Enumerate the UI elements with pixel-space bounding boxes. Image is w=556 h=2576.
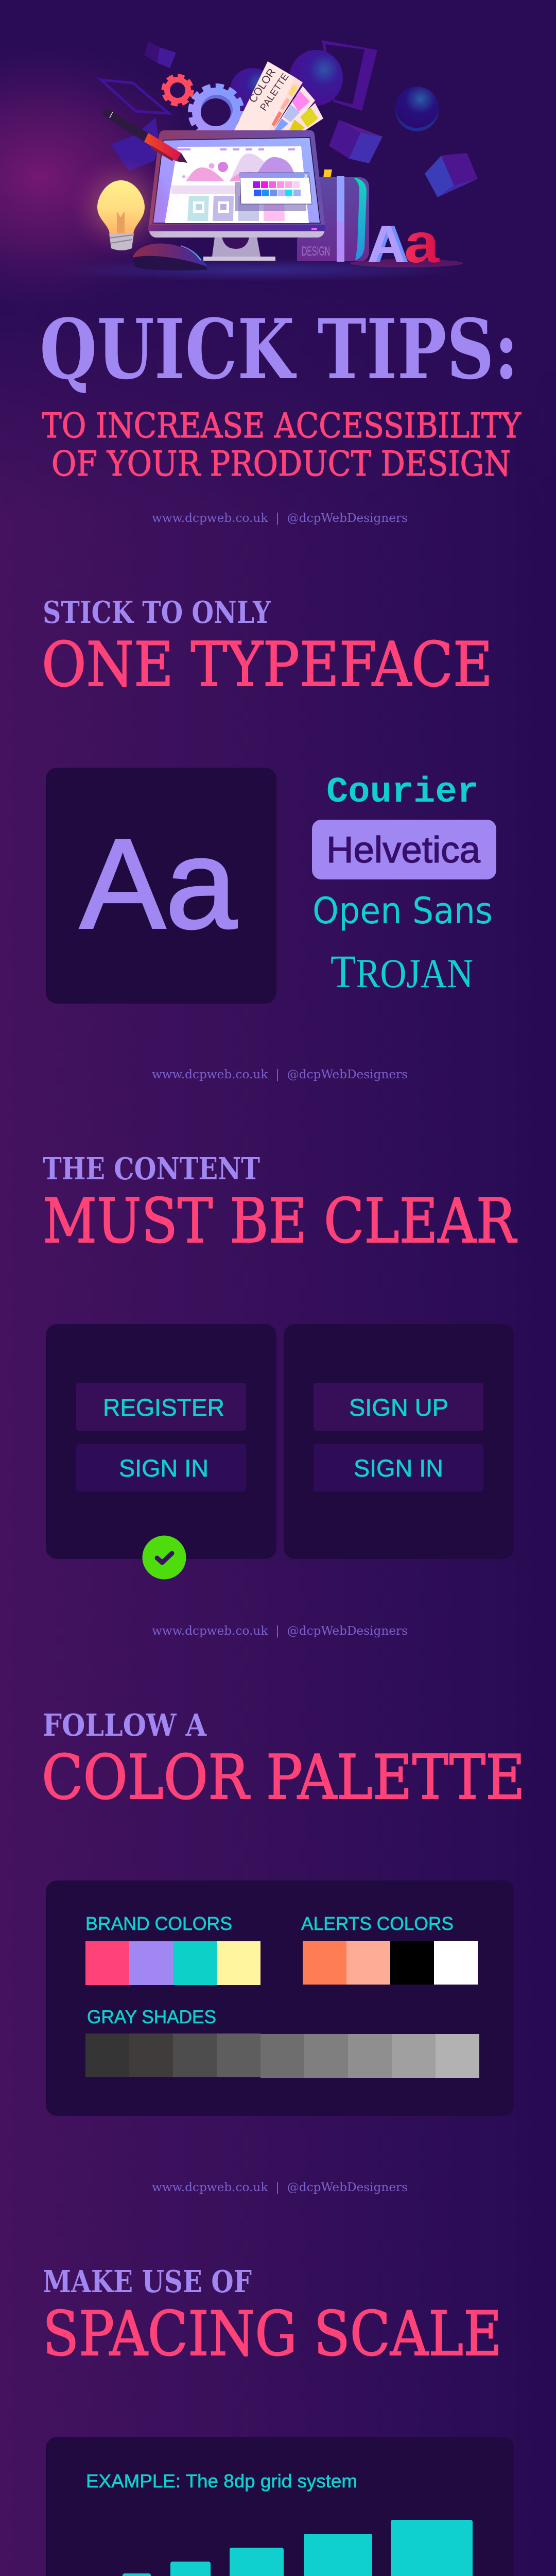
- footer credit: www.dcpweb.co.uk | @dcpWebDesigners: [152, 1624, 408, 1638]
- colour palette swatch cards: [234, 61, 323, 130]
- panel: confusing labels: SIGN UP: [349, 1394, 448, 1421]
- heading: [43, 2264, 502, 2370]
- monitor stand: [203, 237, 275, 261]
- floating frame left: [101, 80, 169, 113]
- screen nav: [177, 148, 295, 150]
- 3D letters Aa: a: [404, 212, 440, 274]
- panel: clear labels: REGISTER: [103, 1394, 224, 1421]
- alert colours: [301, 1913, 478, 1985]
- heading: THE CONTENT: [43, 1151, 260, 1187]
- floor glow: [51, 259, 463, 281]
- frame right: [322, 40, 377, 111]
- gray shades: GRAY SHADES: [87, 2006, 216, 2027]
- screen chart hills: [182, 154, 294, 181]
- design book: DESIGN: [302, 244, 330, 259]
- stylus pen: [101, 108, 187, 163]
- 3D letters Aa: [367, 212, 440, 274]
- panel: clear labels: SIGN IN: [119, 1454, 208, 1482]
- section: content must be clear: [43, 1151, 518, 1638]
- heading: FOLLOW A: [43, 1707, 207, 1743]
- floating cube right one: [329, 120, 383, 163]
- heading: ONE TYPEFACE: [42, 630, 493, 701]
- sphere behind palette: [230, 50, 343, 112]
- footer credit: www.dcpweb.co.uk | @dcpWebDesigners: [152, 2181, 408, 2194]
- subtitle: OF YOUR PRODUCT DESIGN: [51, 444, 511, 484]
- cube behind pen: [111, 117, 160, 171]
- floating cube top left: [144, 41, 176, 68]
- panel: Aa specimen: Aa: [80, 812, 237, 955]
- colour picker popup: x: [304, 172, 308, 179]
- heading: STICK TO ONLY: [43, 595, 271, 630]
- heading: MAKE USE OF: [43, 2264, 252, 2299]
- lavender gear: [190, 86, 242, 138]
- colour palette swatch cards: PALETTE: [258, 72, 291, 113]
- brand colours: BRAND COLORS: [85, 1913, 232, 1934]
- screen content bar and cards: [171, 182, 306, 221]
- section: spacing scale: [43, 2264, 514, 2576]
- footer credit: www.dcpweb.co.uk | @dcpWebDesigners: [152, 1068, 408, 1081]
- gray shades: [85, 2006, 479, 2078]
- section: colour palette: [42, 1707, 525, 2194]
- blue sphere: [395, 87, 439, 131]
- section: one typeface: [42, 595, 496, 1081]
- 3D letters Aa: A: [371, 215, 409, 274]
- panel: 8dp grid: [46, 2437, 514, 2576]
- heading: [42, 1707, 525, 1814]
- brand colours: [85, 1913, 260, 1985]
- heading: [42, 595, 493, 701]
- floating cube right two: [425, 153, 478, 197]
- footer credit: www.dcpweb.co.uk | @dcpWebDesigners: [152, 512, 408, 525]
- font list: Courier: [326, 772, 479, 813]
- panel: Aa specimen: [46, 768, 276, 1004]
- colour picker popup: [240, 172, 312, 204]
- selected font pill: Helvetica: [326, 830, 481, 871]
- panel: clear labels: [46, 1324, 276, 1559]
- heading: [43, 1151, 517, 1257]
- font list: TROJAN: [331, 946, 473, 997]
- section: hero and title: [0, 0, 522, 525]
- panel: confusing labels: SIGN IN: [354, 1454, 443, 1482]
- panel: palette: [46, 1880, 514, 2116]
- computer mouse: [133, 244, 207, 270]
- alert colours: ALERTS COLORS: [301, 1913, 454, 1934]
- design book: [297, 170, 369, 262]
- font list: [312, 772, 496, 997]
- 3D letters Aa: A: [367, 215, 406, 274]
- icon: green check: [142, 1535, 186, 1580]
- panel: confusing labels: [284, 1324, 514, 1559]
- red gear: [163, 76, 192, 105]
- light bulb: [70, 155, 172, 258]
- hero illustration: [51, 40, 478, 281]
- colour palette swatch cards: COLOR: [247, 66, 278, 105]
- monitor: [148, 130, 325, 238]
- panel: 8dp grid: EXAMPLE: The 8dp grid system: [86, 2470, 357, 2492]
- subtitle: [42, 406, 522, 484]
- bar chart: [90, 2520, 473, 2576]
- font list: Open Sans: [312, 890, 493, 932]
- selected font pill: [312, 820, 496, 879]
